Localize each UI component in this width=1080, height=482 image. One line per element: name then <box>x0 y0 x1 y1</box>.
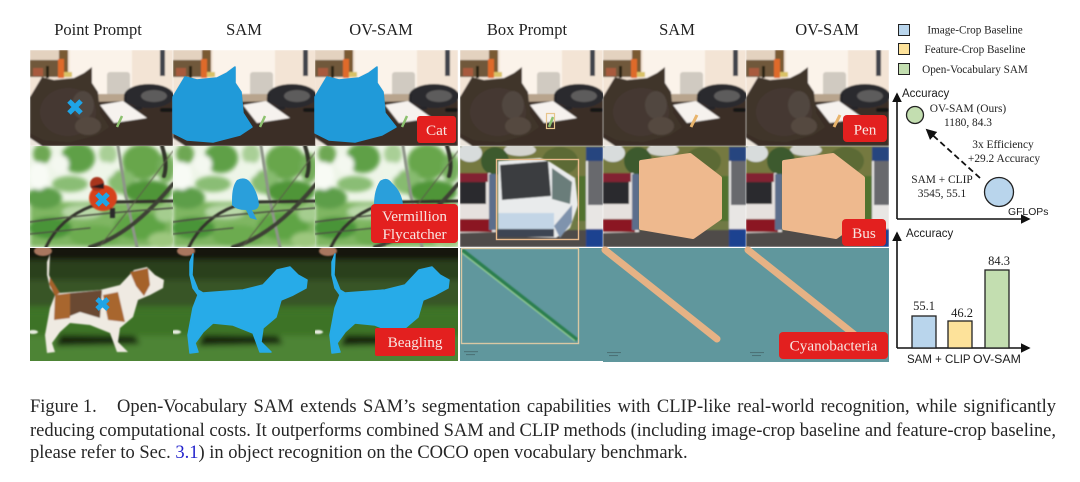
scatter chart: accuracy vs GFLOPs: GFLOPs <box>1008 207 1048 218</box>
column headings: OV-SAM <box>795 20 859 39</box>
label: Vermillion Flycatcher: Vermillion <box>382 208 447 225</box>
arrow: efficiency improvement <box>927 130 980 178</box>
panel: dog SAM mask <box>163 238 326 371</box>
white bus <box>498 158 578 238</box>
label: Beagling: Beagling <box>388 334 443 351</box>
point: OV-SAM <box>906 106 924 124</box>
label: Beagling <box>375 328 455 356</box>
column headings: OV-SAM <box>349 20 413 39</box>
legend: Open-Vocabulary SAM <box>922 64 1028 76</box>
panel: dog point prompt <box>20 238 183 371</box>
label: Pen <box>843 115 887 142</box>
column headings: Box Prompt <box>487 20 568 39</box>
panel: cyanobacteria box prompt <box>460 248 603 361</box>
label: Pen: Pen <box>854 122 877 138</box>
panel: pen SAM mask <box>603 50 747 146</box>
column headings: SAM <box>659 20 695 39</box>
bar: OV-SAM 84.3: 84.3 <box>988 254 1010 268</box>
column headings <box>54 20 859 39</box>
annotations: SAM + CLIP <box>911 174 973 186</box>
panel: bus SAM mask <box>601 144 746 247</box>
panel: cat OV-SAM mask <box>315 50 459 146</box>
panel: bird OV-SAM mask <box>311 143 461 248</box>
legend <box>898 24 1028 76</box>
annotations: 3x Efficiency <box>972 139 1034 151</box>
legend: Feature-Crop Baseline <box>925 44 1026 56</box>
label: Cyanobacteria <box>779 332 888 359</box>
bar chart: accuracy: OV-SAM <box>973 352 1021 366</box>
panel: cyanobacteria OV-SAM mask <box>746 248 889 362</box>
panel: pen box prompt <box>460 50 604 146</box>
panel: bus OV-SAM mask <box>744 144 889 247</box>
bus box prompt <box>496 160 578 240</box>
annotations: 1180, 84.3 <box>944 117 992 129</box>
bar: SAM + CLIP 55.1: 55.1 <box>913 299 935 313</box>
bar chart: accuracy <box>897 228 1029 366</box>
bar chart: accuracy: Accuracy <box>906 228 954 240</box>
label: Vermillion Flycatcher <box>371 204 458 243</box>
panel: bird SAM mask <box>169 143 319 248</box>
caption <box>30 397 1056 463</box>
icon: blue point prompt cross <box>69 101 81 113</box>
legend: Image-Crop Baseline <box>927 24 1023 36</box>
panel: cyanobacteria SAM mask <box>603 248 746 362</box>
annotations: 3545, 55.1 <box>918 188 967 200</box>
label: Cat <box>417 116 456 143</box>
panel: bird point prompt <box>26 143 176 248</box>
caption: Figure 1. <box>30 397 97 417</box>
scatter chart: accuracy vs GFLOPs <box>897 88 1048 219</box>
annotations: +29.2 Accuracy <box>968 153 1040 165</box>
caption line 2: reducing computational costs. It outperforms combined SAM and CLIP methods (including image-crop baseline and feature-crop baseline, <box>30 421 1056 441</box>
cyanobacteria box prompt <box>462 248 578 344</box>
label: Bus: Bus <box>852 225 876 242</box>
annotations: OV-SAM (Ours) <box>930 103 1006 115</box>
red bird <box>89 177 117 218</box>
annotations <box>911 103 1040 200</box>
bar: 46.2: 46.2 <box>951 306 973 320</box>
point: SAM + CLIP <box>984 178 1014 206</box>
label: Bus <box>842 219 886 246</box>
caption: Open-Vocabulary SAM extends SAM’s segmentation capabilities with CLIP-like real-world recognition, while significantly <box>117 397 1056 417</box>
caption: please refer to Sec. 3.1) in object recognition on the COCO open vocabulary benchmark. <box>30 443 688 463</box>
panel: cat SAM mask <box>173 50 317 146</box>
label: Vermillion Flycatcher: Flycatcher <box>382 226 447 243</box>
icon: blue point prompt cross <box>97 194 108 205</box>
scatter chart: accuracy vs GFLOPs: Accuracy <box>902 88 950 100</box>
pen box prompt <box>546 114 554 128</box>
panel: bus box prompt <box>458 144 603 247</box>
label: Cyanobacteria: Cyanobacteria <box>790 338 878 354</box>
column headings: SAM <box>226 20 262 39</box>
panel: cat point prompt <box>30 50 174 146</box>
bar chart: accuracy: SAM + CLIP <box>907 354 971 366</box>
panel: pen OV-SAM mask <box>746 50 890 146</box>
beagle <box>45 254 164 353</box>
panel: dog OV-SAM mask <box>305 238 468 371</box>
column headings: Point Prompt <box>54 20 142 39</box>
green filament <box>462 250 577 341</box>
label: Cat: Cat <box>426 122 448 139</box>
icon: blue point prompt cross <box>97 299 108 309</box>
